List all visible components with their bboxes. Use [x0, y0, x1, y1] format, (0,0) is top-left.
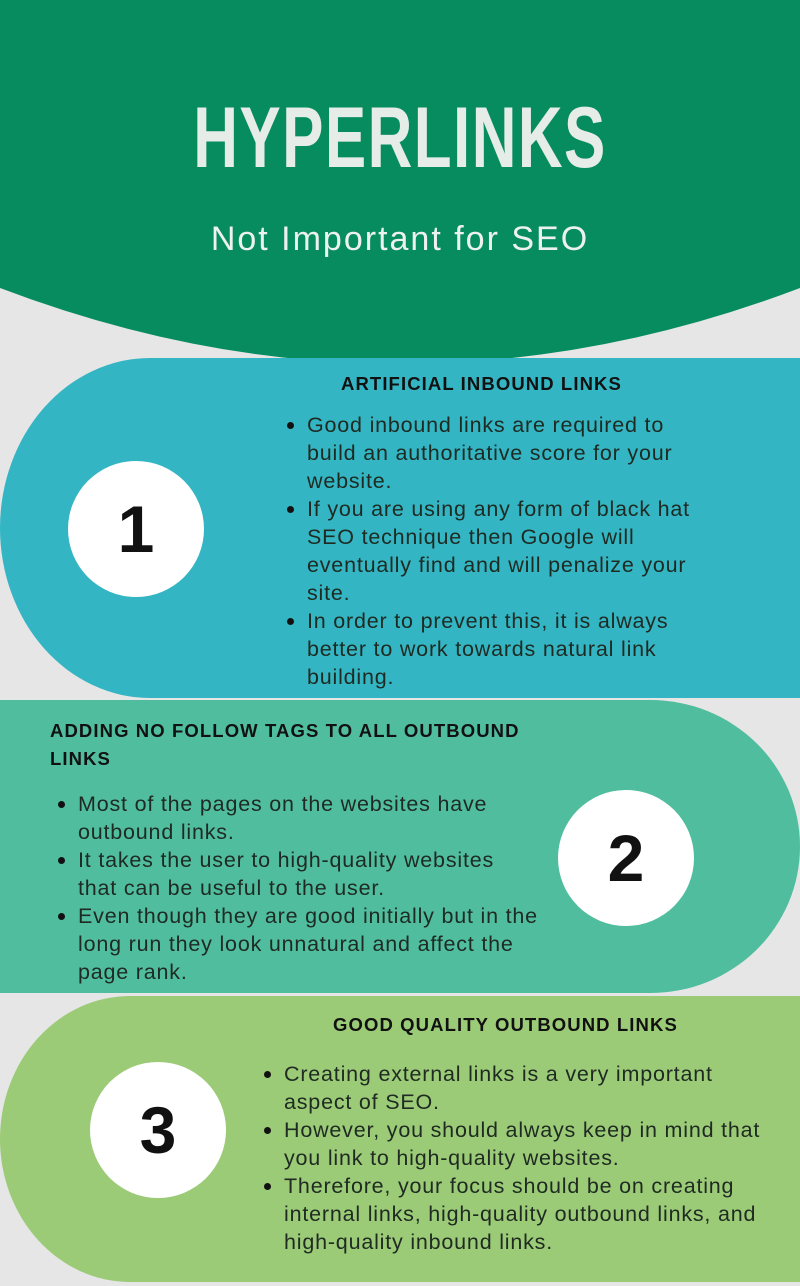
bullets 1: better to work towards natural link: [307, 637, 656, 661]
bullets 3: However, you should always keep in mind that: [284, 1118, 760, 1142]
bullets 1: In order to prevent this, it is always: [307, 609, 668, 633]
bullets 1: building.: [307, 665, 394, 689]
number circle 2: [558, 790, 694, 926]
bullets 2: long run they look unnatural and affect the: [78, 932, 514, 956]
number circle 2: 2: [608, 821, 644, 895]
bullets 1: [287, 413, 690, 689]
bullets 3: you link to high-quality websites.: [284, 1146, 620, 1170]
heading 1: ARTIFICIAL INBOUND LINKS: [341, 373, 622, 394]
subtitle: Not Important for SEO: [211, 220, 589, 258]
bullets 2: page rank.: [78, 960, 188, 984]
bullets 1: Good inbound links are required to: [307, 413, 664, 437]
bullets 1: If you are using any form of black hat: [307, 497, 690, 521]
bullets 3: internal links, high-quality outbound links, and: [284, 1202, 756, 1226]
bullets 2: Most of the pages on the websites have: [78, 792, 487, 816]
bullets 1: site.: [307, 581, 350, 605]
panel: no follow tags: [0, 700, 800, 993]
heading 3: GOOD QUALITY OUTBOUND LINKS: [333, 1014, 678, 1035]
bullets 2: It takes the user to high-quality websites: [78, 848, 494, 872]
number circle 1: [68, 461, 204, 597]
bullets 2: [58, 792, 538, 984]
bullets 1: SEO technique then Google will: [307, 525, 635, 549]
heading 2: ADDING NO FOLLOW TAGS TO ALL OUTBOUND: [50, 720, 520, 741]
bullets 2: outbound links.: [78, 820, 235, 844]
header background: [0, 0, 800, 358]
bullets 3: high-quality inbound links.: [284, 1230, 553, 1254]
number circle 3: [90, 1062, 226, 1198]
panel: good quality outbound links: [0, 996, 800, 1282]
bullets 1: eventually find and will penalize your: [307, 553, 686, 577]
bullets 1: build an authoritative score for your: [307, 441, 672, 465]
number circle 3: 3: [140, 1093, 176, 1167]
panel: artificial inbound links: [0, 358, 800, 698]
heading 2: LINKS: [50, 748, 111, 769]
bullets 3: aspect of SEO.: [284, 1090, 440, 1114]
bullets 2: that can be useful to the user.: [78, 876, 385, 900]
bullets 1: website.: [307, 469, 392, 493]
title: HYPERLINKS: [193, 90, 607, 186]
heading 2: [50, 720, 520, 769]
bullets 3: [264, 1062, 760, 1254]
bullets 2: Even though they are good initially but in the: [78, 904, 538, 928]
number circle 1: 1: [118, 492, 154, 566]
bullets 3: Therefore, your focus should be on creating: [284, 1174, 734, 1198]
bullets 3: Creating external links is a very important: [284, 1062, 713, 1086]
